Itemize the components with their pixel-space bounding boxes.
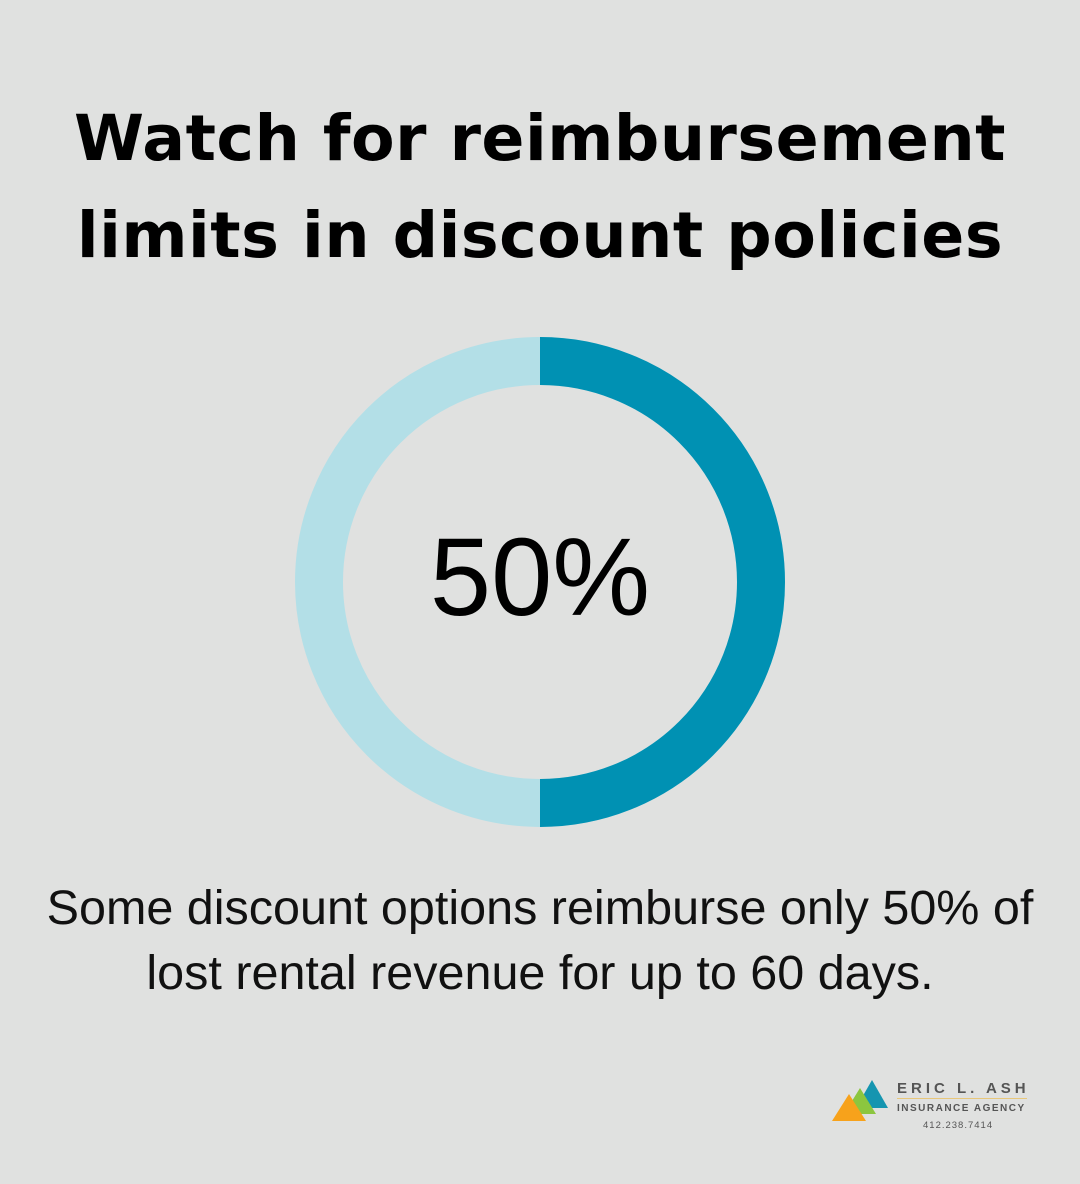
body text: Some discount options reimburse only 50% of bbox=[47, 881, 1033, 935]
title: limits in discount policies bbox=[77, 198, 1003, 272]
body text: lost rental revenue for up to 60 days. bbox=[146, 946, 934, 1000]
logo: INSURANCE AGENCY bbox=[897, 1103, 1026, 1114]
logo: ERIC L. ASH bbox=[897, 1080, 1030, 1097]
body text bbox=[47, 881, 1034, 1000]
logo: 412.238.7414 bbox=[923, 1120, 993, 1131]
logo bbox=[832, 1080, 1030, 1131]
title bbox=[74, 101, 1006, 272]
title: Watch for reimbursement bbox=[74, 101, 1006, 175]
donut chart: 50% bbox=[430, 516, 650, 639]
